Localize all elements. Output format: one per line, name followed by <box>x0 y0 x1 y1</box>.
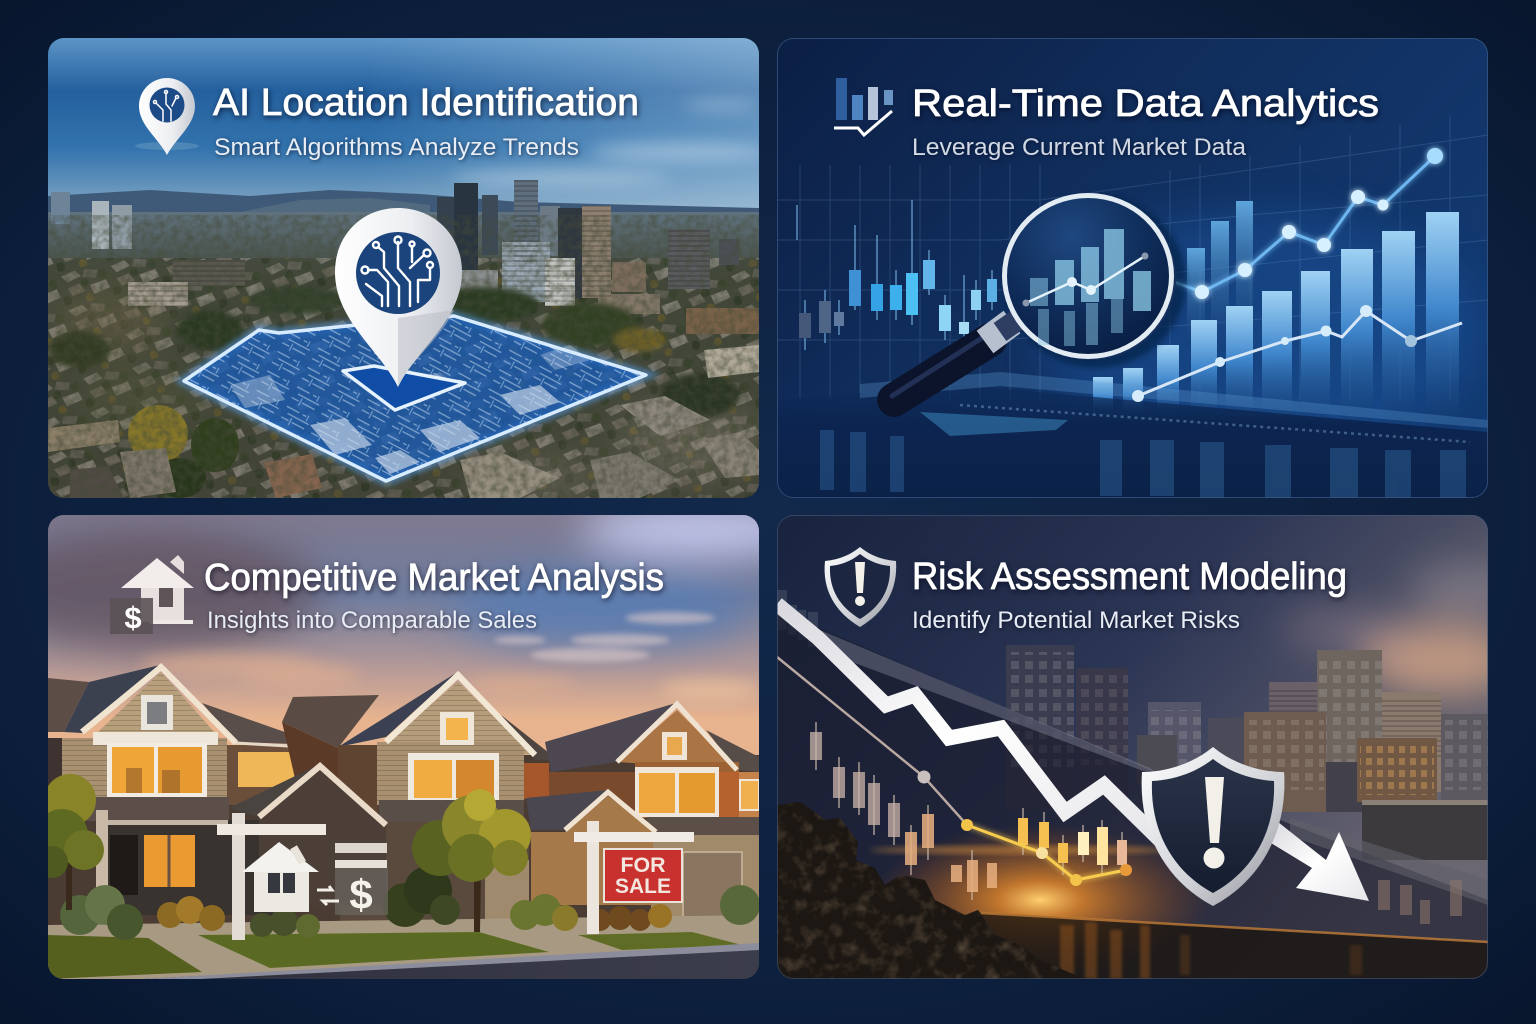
sky <box>48 38 759 218</box>
price card: $ <box>349 871 373 918</box>
comparison sign <box>217 813 388 940</box>
for sale sign <box>574 821 694 934</box>
sky <box>48 515 759 755</box>
icon: house and dollar <box>110 555 194 635</box>
magnifying glass <box>892 193 1186 400</box>
clouds <box>1280 566 1530 696</box>
panel: Risk Assessment Modeling <box>777 515 1530 979</box>
clouds <box>450 101 770 185</box>
tree belts <box>50 286 740 417</box>
subheading: Leverage Current Market Data <box>912 134 1247 161</box>
texture <box>48 215 759 498</box>
floor <box>777 372 1488 498</box>
foreground foliage <box>777 800 1087 979</box>
clouds <box>494 612 715 662</box>
panel: Competitive Market Analysis <box>0 504 820 980</box>
heading: Competitive Market Analysis <box>204 557 664 599</box>
shrubs <box>60 866 760 940</box>
lower trend line <box>1132 305 1462 402</box>
base fill <box>48 515 759 979</box>
house glyph <box>242 842 319 912</box>
panel: Real-Time Data Analytics <box>777 38 1488 498</box>
candlesticks <box>810 722 1462 924</box>
house: right <box>526 703 759 923</box>
subheading: Smart Algorithms Analyze Trends <box>214 134 579 161</box>
candlestick chart <box>797 200 997 350</box>
circuit glyph <box>362 236 433 306</box>
highlighted parcel <box>184 316 646 481</box>
distant hills <box>48 190 759 212</box>
dark lower overlay <box>777 610 1488 979</box>
water <box>950 912 1488 979</box>
icon: bars and check <box>834 78 893 135</box>
city buildings <box>1006 645 1488 860</box>
lawn and paths <box>48 915 759 980</box>
foreground trees and houses <box>48 345 759 506</box>
tree: left <box>36 774 104 910</box>
orange glow <box>870 825 1210 975</box>
tree: centre <box>412 789 531 932</box>
icon: house and dollar: $ <box>124 600 142 635</box>
warm colour patches <box>50 290 760 500</box>
large shield <box>1142 747 1284 906</box>
heading: AI Location Identification <box>213 82 639 124</box>
upper trend line <box>1174 148 1443 299</box>
subheading: Identify Potential Market Risks <box>912 607 1240 634</box>
city ground <box>48 212 759 498</box>
large location pin <box>335 208 462 387</box>
background <box>777 515 1488 979</box>
stepped chart silhouette <box>777 590 818 647</box>
selected lot <box>343 366 465 410</box>
icon: location pin <box>135 78 199 155</box>
house: centre <box>282 673 558 925</box>
price card <box>317 843 388 918</box>
for sale sign: SALE <box>615 875 671 898</box>
house: left <box>48 665 322 915</box>
skyline: towers <box>51 180 759 334</box>
bar chart <box>1093 201 1459 406</box>
for sale sign: FOR <box>620 854 666 877</box>
house: stone gable <box>230 762 388 860</box>
heading: Risk Assessment Modeling <box>912 556 1347 598</box>
lens bars <box>1030 229 1151 346</box>
panel: AI Location Identification <box>48 38 770 506</box>
icon: shield <box>825 547 896 627</box>
large falling arrow <box>777 604 1369 901</box>
subheading: Insights into Comparable Sales <box>207 607 537 634</box>
background <box>777 38 1488 498</box>
heading: Real-Time Data Analytics <box>912 83 1379 125</box>
falling trend line <box>777 657 1132 886</box>
